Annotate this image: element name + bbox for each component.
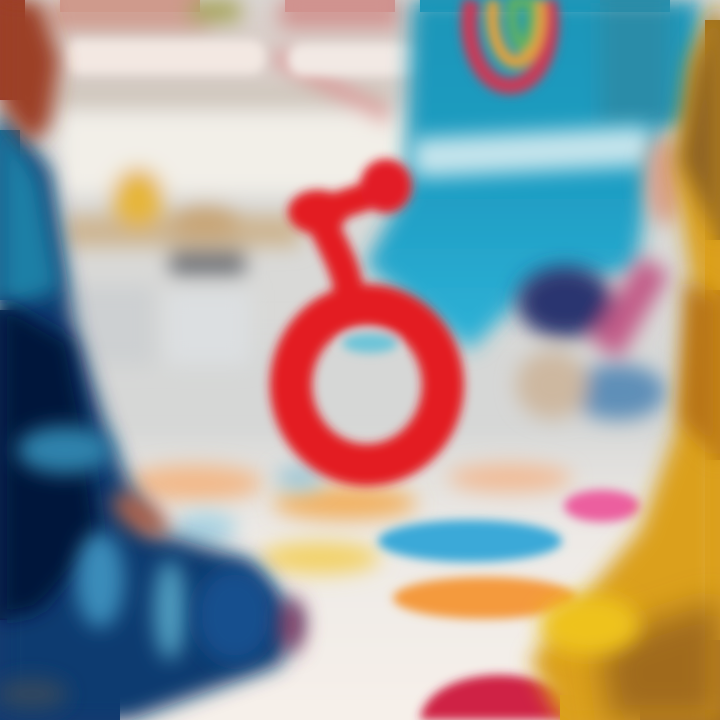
top left shelf area [50, 0, 410, 365]
teal panel [365, 0, 700, 350]
red ring toy [288, 159, 443, 465]
right foreground child in yellow [530, 0, 720, 720]
floor colour ovals [127, 464, 640, 720]
blurred heading strip [65, 40, 426, 76]
right edge base colours [560, 20, 720, 720]
rainbow logo [469, 0, 551, 86]
left foreground hair [0, 0, 60, 145]
seated child in background [516, 135, 685, 420]
white banner on teal panel [411, 126, 653, 178]
left edge base colours [0, 0, 120, 720]
left foreground child in blue sweater [0, 110, 304, 720]
